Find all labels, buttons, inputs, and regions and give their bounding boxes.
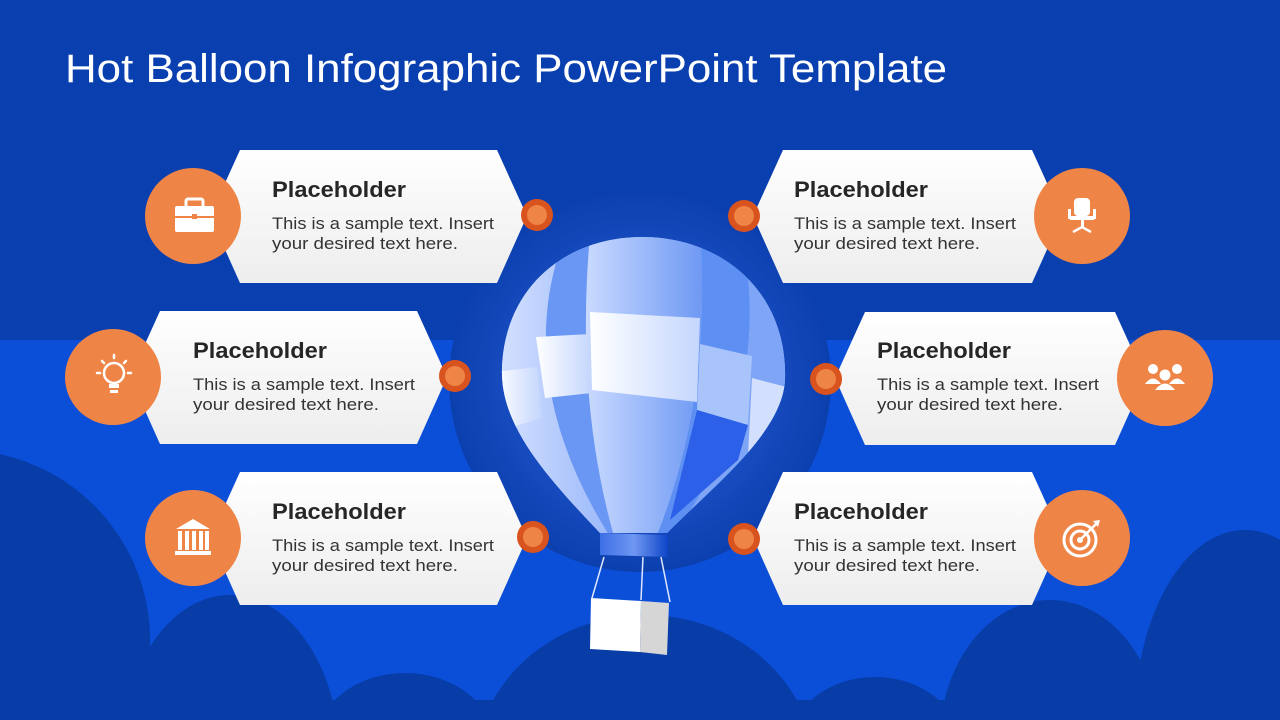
panel: left top: Placeholder [272, 177, 406, 202]
icon: briefcase [145, 168, 241, 264]
title: Hot Balloon Infographic PowerPoint Template [65, 47, 947, 91]
panel: right middle [810, 312, 1213, 445]
panel: left top: your desired text here. [272, 234, 458, 253]
panel: left middle [65, 311, 471, 444]
panel: left bottom: Placeholder [272, 499, 406, 524]
background lower sky [0, 340, 1280, 720]
panel: right middle: Placeholder [877, 338, 1011, 363]
panel: left bottom: your desired text here. [272, 556, 458, 575]
panel: right bottom: This is a sample text. Insert [794, 536, 1016, 555]
panel: left middle: This is a sample text. Insert [193, 375, 415, 394]
panel: right middle: This is a sample text. Insert [877, 375, 1099, 394]
panel: left top [145, 150, 553, 283]
panel: right bottom: your desired text here. [794, 556, 980, 575]
panel: right middle: your desired text here. [877, 395, 1063, 414]
light bands [502, 367, 540, 426]
icon: bank [145, 490, 241, 586]
panel: right bottom [728, 472, 1130, 605]
panel: left middle: Placeholder [193, 338, 327, 363]
panel: left bottom [145, 472, 549, 605]
icon: target [1034, 490, 1130, 586]
panel: left bottom: This is a sample text. Insert [272, 536, 494, 555]
panel: left top: This is a sample text. Insert [272, 214, 494, 233]
icon: office chair [1034, 168, 1130, 264]
ropes [592, 557, 670, 602]
hot air balloon [495, 230, 800, 655]
panel: right top [728, 150, 1130, 283]
icon: light bulb [65, 329, 161, 425]
clouds [0, 450, 1280, 720]
panel: right bottom: Placeholder [794, 499, 928, 524]
icon: team [1117, 330, 1213, 426]
panel: left middle: your desired text here. [193, 395, 379, 414]
panel: right top: your desired text here. [794, 234, 980, 253]
burner band [600, 533, 668, 557]
panel: right top: This is a sample text. Insert [794, 214, 1016, 233]
basket [590, 598, 641, 652]
balloon glow circle [449, 190, 831, 572]
panel: right top: Placeholder [794, 177, 928, 202]
